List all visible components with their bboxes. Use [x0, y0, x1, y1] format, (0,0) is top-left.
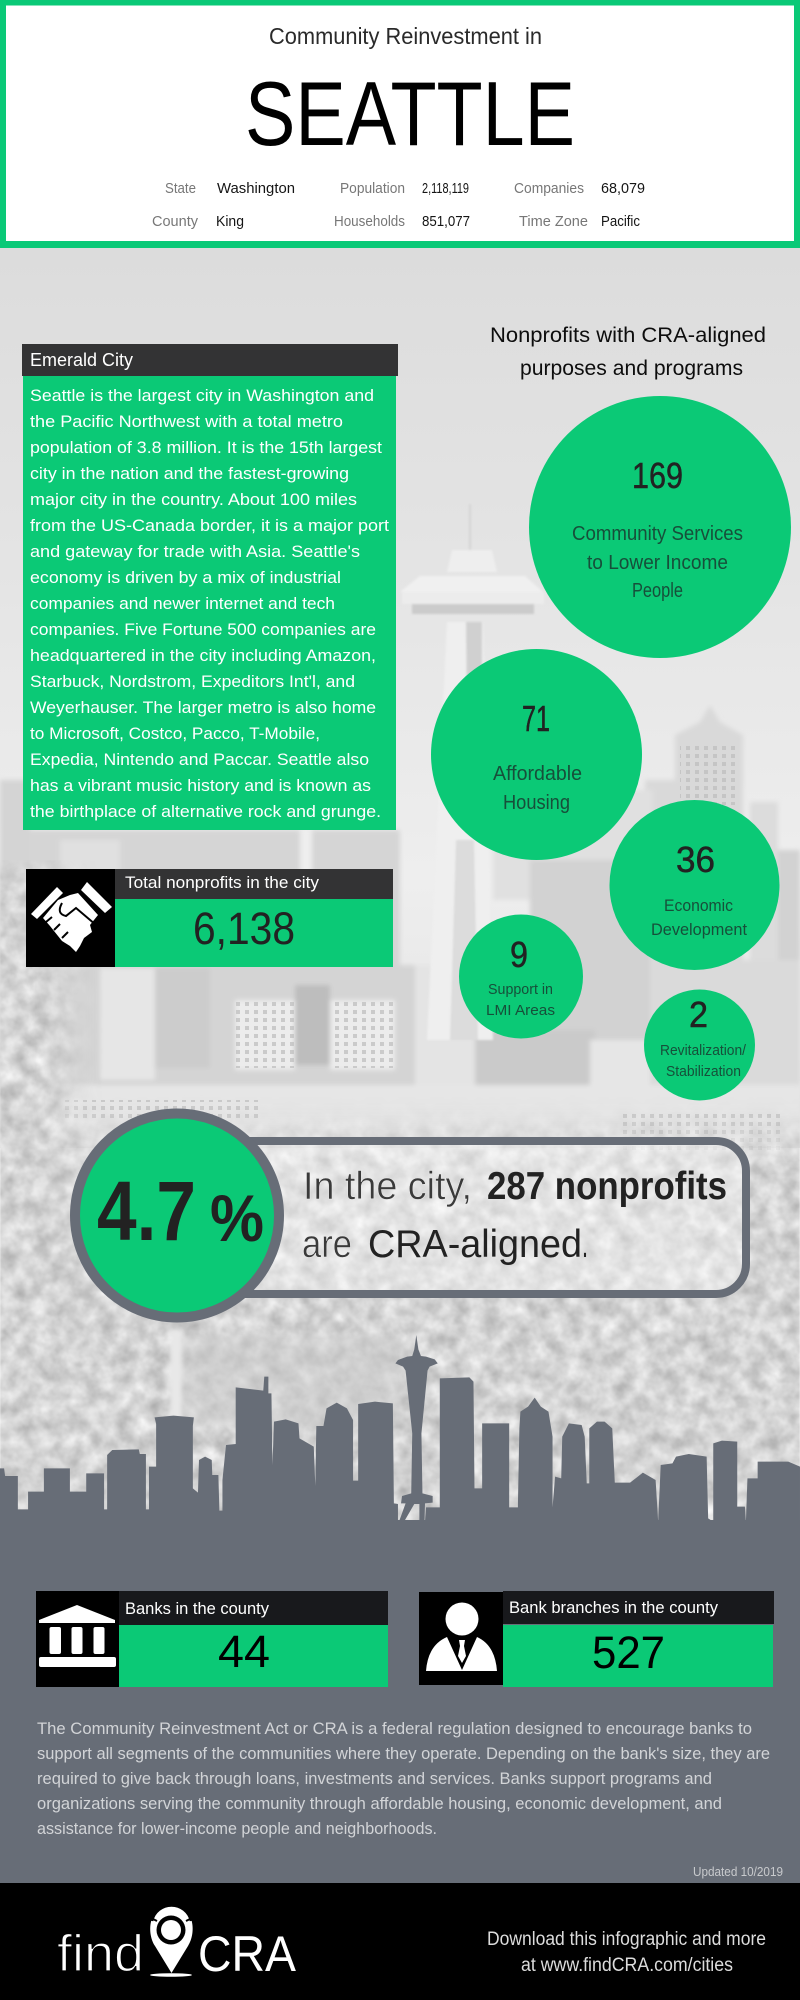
city facts: King	[216, 213, 244, 230]
icon: bank building	[39, 1605, 116, 1667]
description text: Expedia, Nintendo and Paccar. Seattle also	[30, 750, 369, 769]
description text: from the US-Canada border, it is a major port	[30, 516, 389, 535]
text block: about the cra: assistance for lower-income people and neighborhoods.	[37, 1819, 437, 1838]
updated date: Updated 10/2019	[693, 1864, 783, 1879]
callout sentence: .	[582, 1223, 588, 1266]
description text: population of 3.8 million. It is the 15th largest	[30, 438, 382, 457]
download note: Download this infographic and more	[487, 1929, 766, 1950]
description text: the birthplace of alternative rock and grunge.	[30, 802, 381, 821]
text block: about the cra: support all segments of the communities where they operate. Depending on the bank's size, they are	[37, 1744, 770, 1763]
percentage: %	[210, 1181, 264, 1255]
city facts: 68,079	[601, 180, 645, 197]
download note: at www.findCRA.com/cities	[521, 1955, 733, 1976]
card number: 6,138	[193, 903, 295, 954]
bubble: affordable housing: Affordable	[493, 763, 582, 785]
bubble: community services: People	[632, 580, 683, 602]
heading: community reinvestment: Community Reinvestment in	[269, 23, 542, 49]
heading: nonprofits with cra-aligned purposes: Nonprofits with CRA-aligned	[490, 324, 766, 347]
description text: headquartered in the city including Amazon,	[30, 646, 376, 665]
bubble: support in lmi areas: Support in	[488, 981, 553, 998]
callout sentence: CRA-aligned	[368, 1223, 582, 1266]
bubble: support in lmi areas	[459, 914, 583, 1038]
background photo: Seattle skyline in grey	[0, 248, 800, 1560]
bubble: economic development: Economic	[664, 896, 733, 915]
description text: to Microsoft, Costco, Pacco, T-Mobile,	[30, 724, 320, 743]
logo: findCRA: find	[57, 1925, 144, 1983]
bubble: affordable housing: Housing	[503, 792, 570, 814]
icon: person in suit	[426, 1602, 497, 1671]
heading: nonprofits with cra-aligned purposes	[490, 324, 766, 380]
heading: nonprofits with cra-aligned purposes: purposes and programs	[520, 357, 743, 380]
card number: 44	[218, 1626, 270, 1677]
bubble: affordable housing: 71	[522, 698, 550, 739]
city facts: 2,118,119	[422, 180, 469, 197]
text block: about the cra: organizations serving the community through affordable housing, economic development, and	[37, 1794, 722, 1813]
icon: location pin	[150, 1905, 193, 1977]
card label: Bank branches in the county	[509, 1598, 718, 1617]
trees	[0, 860, 800, 1560]
bubble: support in lmi areas: LMI Areas	[486, 1002, 555, 1019]
stat card: bank branches	[419, 1591, 774, 1687]
bubble: revitalization	[644, 990, 755, 1100]
city facts	[152, 180, 645, 230]
city facts: County	[152, 213, 198, 230]
footer	[0, 1883, 800, 2000]
description text: city in the nation and the fastest-growing	[30, 464, 349, 483]
city facts: Population	[340, 180, 405, 197]
text block: about the cra	[37, 1719, 770, 1838]
percentage: 4.7	[97, 1164, 196, 1258]
city facts: Companies	[514, 180, 584, 197]
callout: 4.7% cra-aligned	[75, 1114, 746, 1318]
description text: Seattle is the largest city in Washington and	[30, 386, 374, 405]
bubble: revitalization: Revitalization/	[660, 1042, 747, 1059]
description text	[30, 386, 389, 821]
callout sentence: 287 nonprofits	[487, 1165, 727, 1208]
bubble: revitalization: 2	[689, 994, 708, 1035]
bubble: community services	[529, 396, 791, 658]
callout sentence	[302, 1165, 727, 1266]
text block: about the cra: required to give back through loans, investments and services. Banks support programs and	[37, 1769, 712, 1788]
city facts: 851,077	[422, 213, 470, 230]
bubble: economic development: 36	[676, 839, 715, 880]
space needle silhouette	[395, 1335, 438, 1522]
title: city name: SEATTLE	[245, 64, 575, 165]
bubble: community services: Community Services	[572, 523, 743, 545]
description text: Weyerhauser. The larger metro is also home	[30, 698, 376, 717]
description text: has a vibrant music history and is known as	[30, 776, 371, 795]
description text: Starbuck, Nordstrom, Expeditors Int'l, and	[30, 672, 355, 691]
bubble: revitalization: Stabilization	[666, 1063, 741, 1080]
panel heading: Emerald City	[30, 350, 133, 370]
building windows in photo	[60, 745, 780, 1150]
card number: 527	[592, 1627, 665, 1678]
skyline silhouette	[0, 1335, 800, 1883]
bubble: economic development: Development	[651, 920, 747, 939]
city facts: State	[165, 180, 196, 197]
stat card: banks in the county	[36, 1591, 388, 1687]
bubble: economic development	[610, 800, 780, 970]
city facts: Washington	[217, 180, 295, 197]
stat card: total nonprofits	[26, 869, 393, 967]
bubble: support in lmi areas: 9	[510, 934, 528, 975]
description text: and gateway for trade with Asia. Seattle's	[30, 542, 360, 561]
city facts: Pacific	[601, 213, 640, 230]
card label: Banks in the county	[125, 1599, 269, 1618]
icon: handshake	[31, 882, 112, 952]
logo: findCRA: CRA	[198, 1926, 297, 1982]
callout sentence: are	[302, 1223, 352, 1266]
faint space needle in photo	[400, 504, 544, 1040]
bubble: affordable housing	[431, 649, 642, 860]
city facts: Households	[334, 213, 405, 230]
header panel	[0, 2, 800, 248]
description text: economy is driven by a mix of industrial	[30, 568, 341, 587]
description text: the Pacific Northwest with a total metro	[30, 412, 343, 431]
logo: findCRA	[57, 1905, 297, 1983]
description text: companies. Five Fortune 500 companies are	[30, 620, 376, 639]
city facts: Time Zone	[519, 213, 588, 230]
callout sentence: In the city,	[303, 1165, 472, 1208]
card label: Total nonprofits in the city	[125, 873, 320, 892]
bubble: community services: 169	[632, 455, 683, 496]
description text: companies and newer internet and tech	[30, 594, 335, 613]
percentage	[97, 1164, 264, 1258]
panel: emerald city	[22, 344, 398, 830]
download note	[487, 1929, 766, 1976]
text block: about the cra: The Community Reinvestment Act or CRA is a federal regulation designed to encourage banks to	[37, 1719, 752, 1738]
description text: major city in the country. About 100 miles	[30, 490, 357, 509]
bubble: community services: to Lower Income	[587, 552, 728, 574]
